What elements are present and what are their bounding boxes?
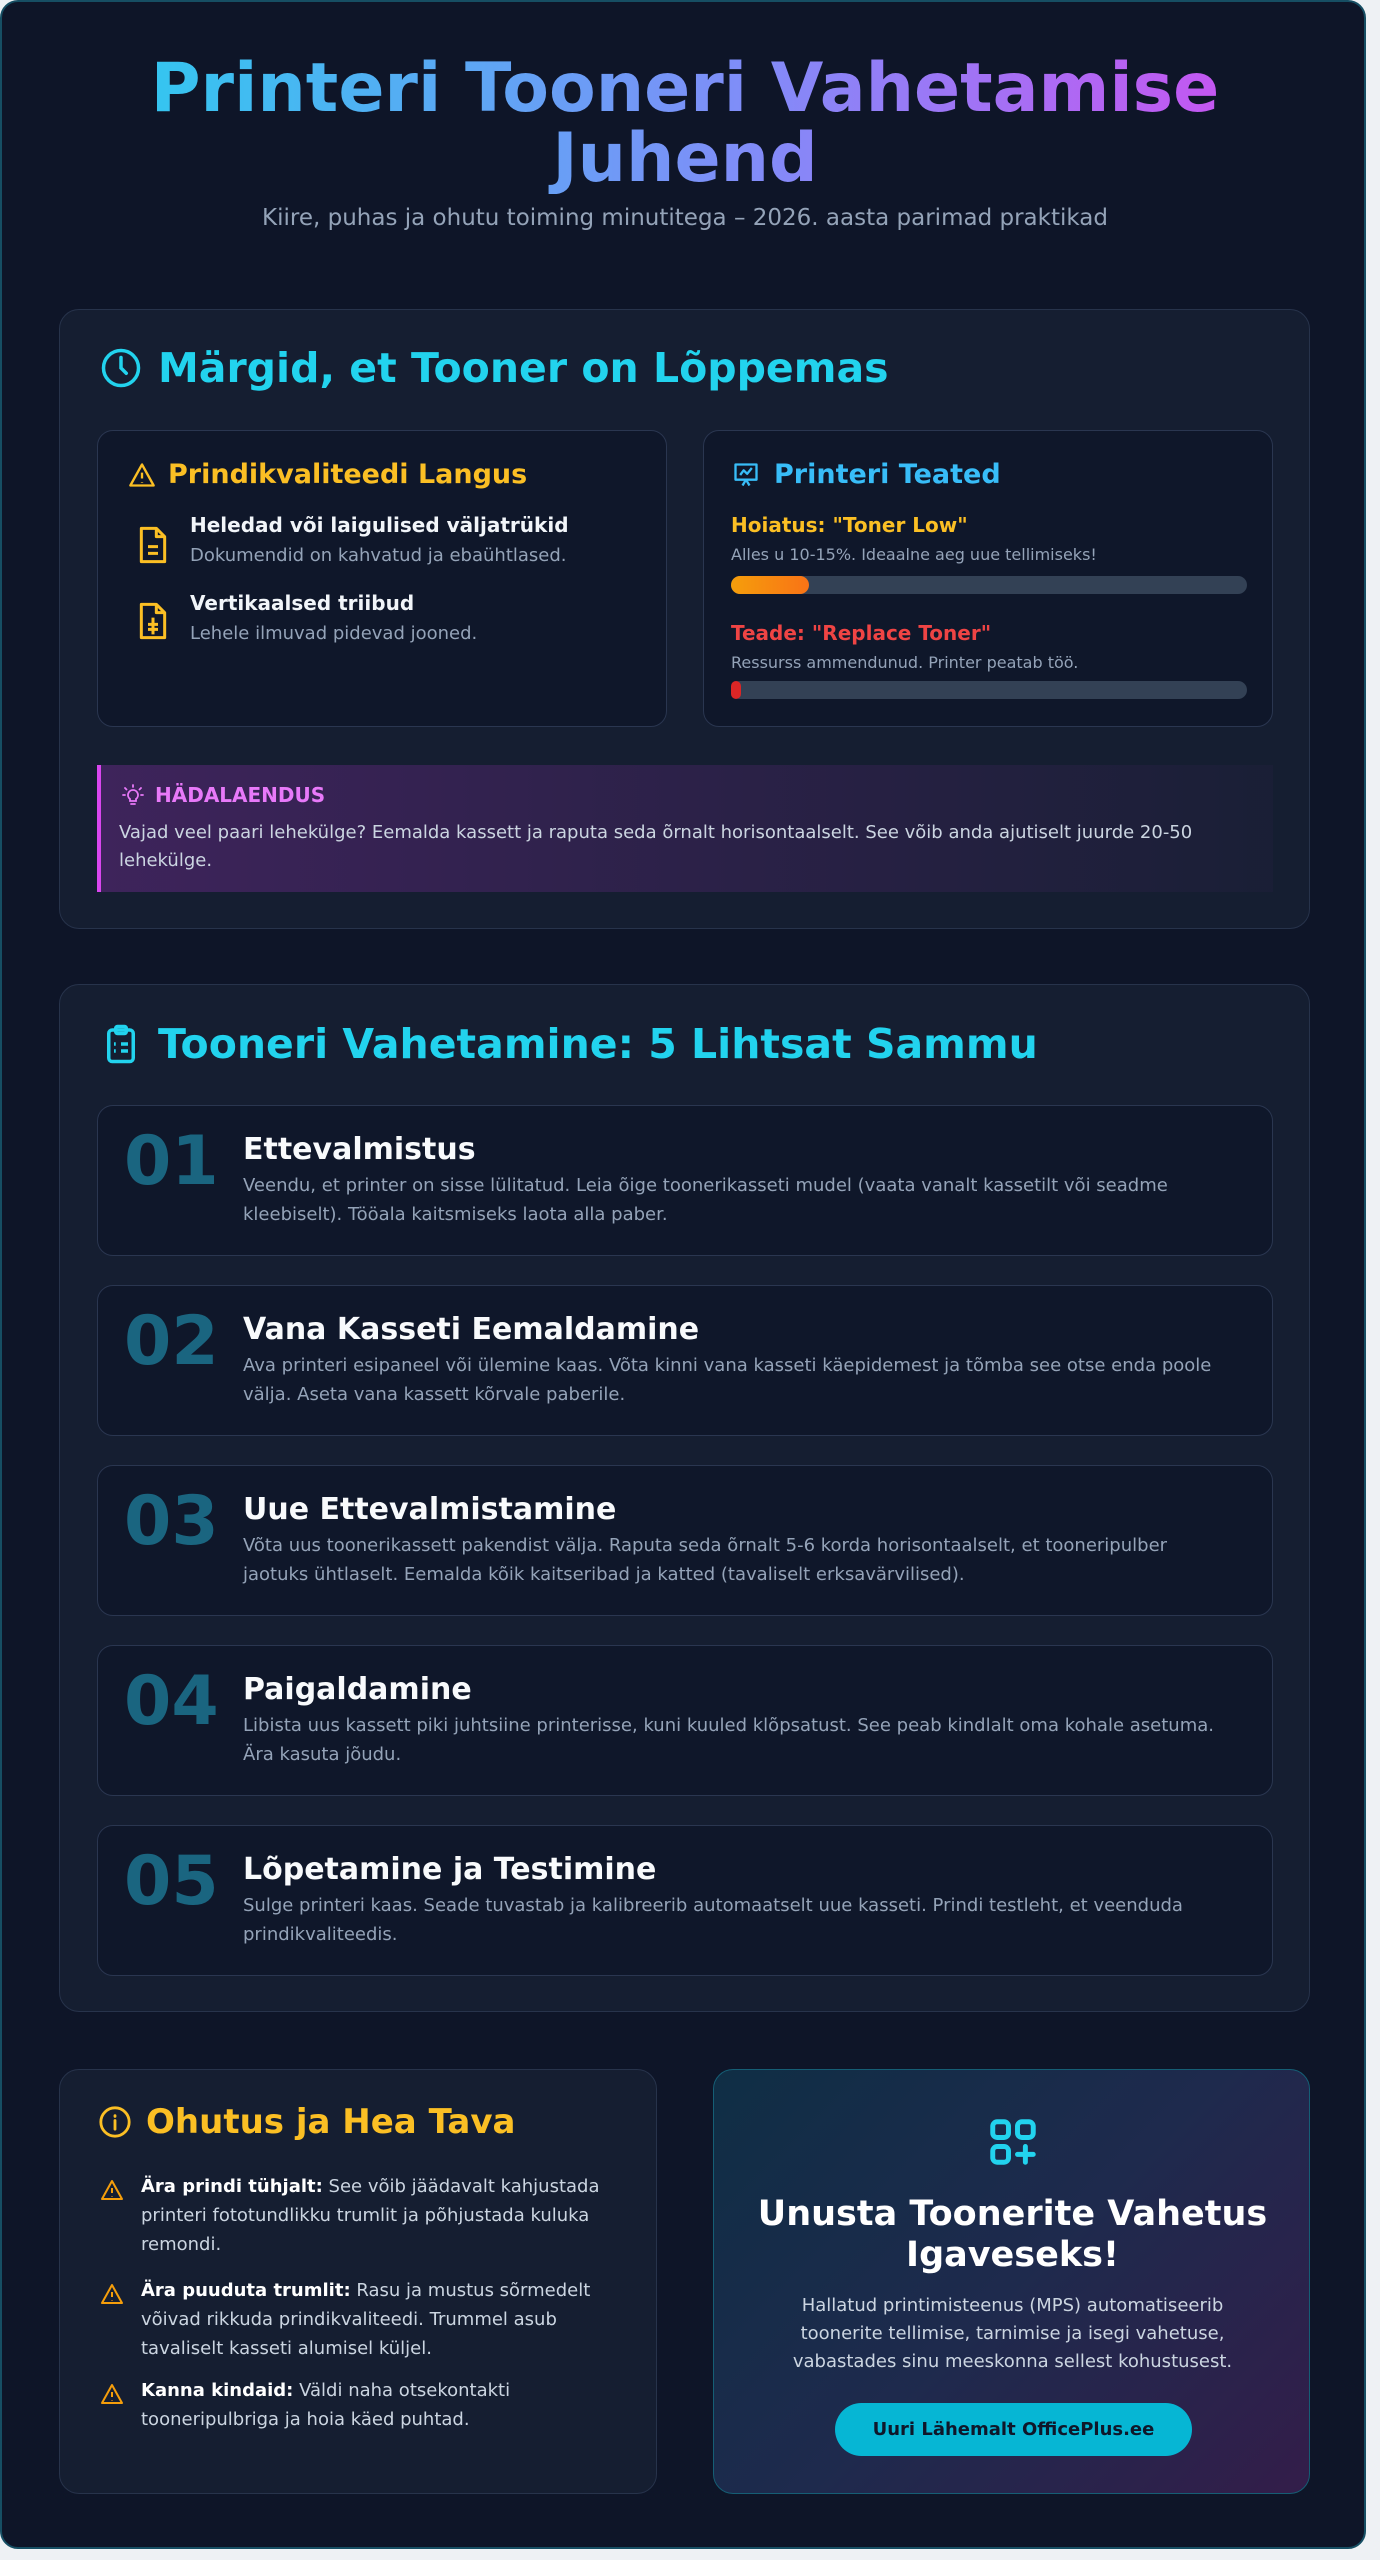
CTA title: Unusta Toonerite Vahetus: [758, 2194, 1267, 2234]
alert: replace toner: Ressurss ammendunud. Printer peatab töö.: [731, 653, 1078, 672]
card: printer messages: [703, 430, 1273, 727]
card heading: Prindikvaliteedi Langus: [168, 459, 527, 490]
CTA button: [835, 2403, 1192, 2456]
CTA button: Uuri Lähemalt OfficePlus.ee: [873, 2419, 1154, 2440]
panel: safety: [59, 2069, 657, 2494]
alert: replace toner: Teade: "Replace Toner": [731, 621, 991, 645]
CTA title: [758, 2194, 1267, 2275]
card: print quality decline: [97, 430, 667, 727]
heading: steps: Tooneri Vahetamine: 5 Lihtsat Sammu: [158, 1020, 1038, 1068]
item: vertical stripes: Vertikaalsed triibud: [190, 591, 414, 615]
progress bar 15%: [731, 576, 1247, 594]
step 02: Ava printeri esipaneel või ülemine kaas. Võta kinni vana kasseti käepidemest ja tõmba see otse enda poole välja. Aseta vana kassett kõrvale paberile.: [243, 1355, 1211, 1405]
step 03: 03: [124, 1482, 219, 1561]
step 04: Libista uus kassett piki juhtsiine printerisse, kuni kuuled klõpsatust. See peab kindlalt oma kohale asetuma. Ära kasuta jõudu.: [243, 1715, 1214, 1765]
icon: apps: [990, 2119, 1036, 2165]
step 04: 04: [124, 1662, 219, 1741]
alert: toner low: Alles u 10-15%. Ideaalne aeg uue tellimiseks!: [731, 545, 1097, 564]
panel: 5 steps: [59, 984, 1310, 2012]
step 05: [97, 1825, 1273, 1976]
step 03: Võta uus toonerikassett pakendist välja. Raputa seda õrnalt 5-6 korda horisontaalselt, et tooneripulber jaotuks ühtlaselt. Eemalda kõik kaitseribad ja katted (tavaliselt erksavärvilised).: [243, 1535, 1167, 1585]
item: light prints: Dokumendid on kahvatud ja ebaühtlased.: [190, 545, 567, 566]
CTA title: Igaveseks!: [906, 2235, 1119, 2275]
safety item 2: Ära puuduta trumlit: Rasu ja mustus sõrmedelt võivad rikkuda prindikvaliteedi. Trummel asub tavaliselt kasseti alumisel küljel.: [141, 2280, 590, 2359]
icon: clipboard: [107, 1024, 135, 1064]
callout: emergency: [97, 765, 1273, 892]
callout: emergency: HÄDALAENDUS: [155, 783, 325, 807]
title: Printeri Tooneri Vahetamise Juhend: [151, 49, 1219, 198]
heading: safety: Ohutus ja Hea Tava: [146, 2102, 515, 2142]
safety item 1: Ära prindi tühjalt: See võib jäädavalt kahjustada printeri fototundlikku trumlit ja põhjustada kuluka remondi.: [141, 2176, 600, 2255]
alert: toner low: Hoiatus: "Toner Low": [731, 513, 968, 537]
safety item 3: Kanna kindaid: Väldi naha otsekontakti tooneripulbriga ja hoia käed puhtad.: [141, 2380, 510, 2430]
alert: replace toner: [731, 621, 1078, 672]
panel: CTA: [713, 2069, 1310, 2494]
item: vertical stripes: Lehele ilmuvad pidevad jooned.: [190, 623, 477, 644]
item: vertical stripes: [140, 591, 477, 644]
card heading: Printeri Teated: [774, 459, 1001, 490]
item: light prints: Heledad või laigulised väljatrükid: [190, 513, 569, 537]
item: light prints: [140, 513, 569, 566]
alert: toner low: [731, 513, 1097, 564]
step 02: 02: [124, 1302, 219, 1381]
progress bar empty: [731, 681, 1247, 699]
step 04: Paigaldamine: [243, 1672, 472, 1707]
step 03: Uue Ettevalmistamine: [243, 1492, 616, 1527]
subtitle: Kiire, puhas ja ohutu toiming minutitega – 2026. aasta parimad praktikad: [262, 205, 1108, 231]
step 01: Ettevalmistus: [243, 1132, 476, 1167]
step 05: 05: [124, 1842, 219, 1921]
CTA text: Hallatud printimisteenus (MPS) automatiseerib toonerite tellimise, tarnimise ja isegi vahetuse, vabastades sinu meeskonna sellest kohustusest.: [793, 2295, 1232, 2372]
step 05: Lõpetamine ja Testimine: [243, 1852, 656, 1887]
step 02: Vana Kasseti Eemaldamine: [243, 1312, 699, 1347]
step 01: [97, 1105, 1273, 1256]
heading: signs: Märgid, et Tooner on Lõppemas: [158, 344, 889, 392]
step 01: 01: [124, 1122, 219, 1201]
step 05: Sulge printeri kaas. Seade tuvastab ja kalibreerib automaatselt uue kasseti. Prindi testleht, et veenduda prindikvaliteedis.: [243, 1895, 1183, 1945]
callout: emergency: Vajad veel paari lehekülge? Eemalda kassett ja raputa seda õrnalt horisontaalselt. See võib anda ajutiselt juurde 20-50 lehekülge.: [119, 822, 1192, 871]
panel: signs toner running low: [59, 309, 1310, 929]
step 04: [97, 1645, 1273, 1796]
step 01: Veendu, et printer on sisse lülitatud. Leia õige toonerikasseti mudel (vaata vanalt kassetilt või seadme kleebiselt). Tööala kaitsmiseks laota alla paber.: [243, 1175, 1168, 1225]
step 02: [97, 1285, 1273, 1436]
step 03: [97, 1465, 1273, 1616]
icon: clock: [102, 348, 140, 388]
